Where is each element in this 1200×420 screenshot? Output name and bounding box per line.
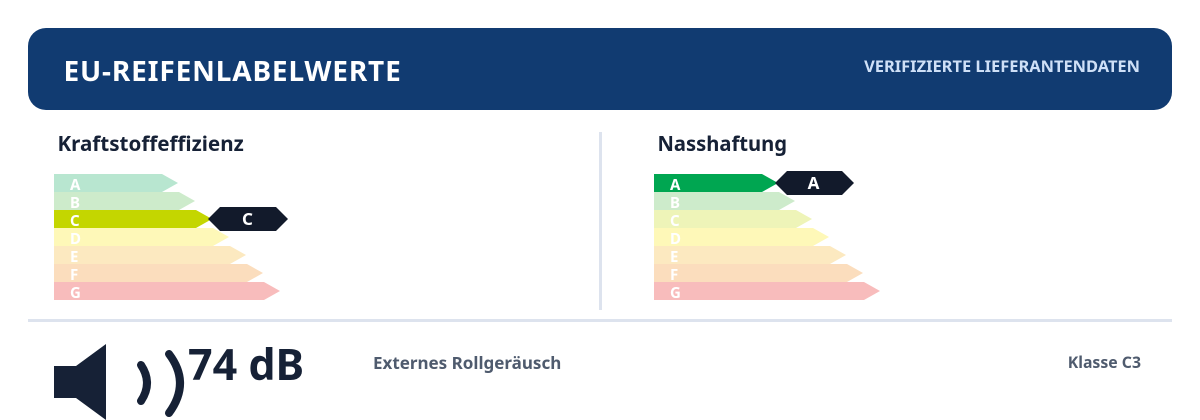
rating scale: fuel efficiency: B — [70, 193, 80, 213]
header banner — [28, 28, 1172, 110]
tyre class: Klasse C3 — [1068, 351, 1141, 373]
rating scale: wet grip: B — [670, 193, 680, 213]
rating scale: wet grip: D — [670, 229, 681, 249]
rating scale: fuel efficiency: D — [70, 229, 81, 249]
heading: fuel efficiency: Kraftstoffeffizienz — [58, 130, 244, 158]
panel: wet grip — [654, 129, 880, 303]
rating scale: fuel efficiency: G — [70, 283, 81, 303]
section divider — [28, 319, 1172, 322]
rating scale: wet grip — [654, 174, 880, 303]
rating badge: C — [208, 207, 288, 231]
heading: wet grip: Nasshaftung — [658, 129, 787, 157]
panel: fuel efficiency — [54, 130, 288, 303]
rating scale: fuel efficiency: A — [70, 175, 81, 195]
icon: speaker with sound waves — [54, 344, 180, 420]
rating scale: wet grip: C — [670, 211, 680, 231]
rating badge: A — [775, 171, 854, 195]
rating scale: fuel efficiency: C — [70, 211, 80, 231]
rating badge: A: A — [808, 171, 820, 194]
title: EU-REIFENLABELWERTE — [64, 52, 402, 90]
rating scale: wet grip: F — [670, 265, 678, 285]
noise label: Externes Rollgeräusch — [373, 351, 561, 374]
panel divider — [599, 132, 602, 310]
noise value: 74 dB — [188, 334, 304, 393]
header note: VERIFIZIERTE LIEFERANTENDATEN — [864, 54, 1140, 77]
rating scale: fuel efficiency: F — [70, 265, 78, 285]
rating scale: fuel efficiency — [54, 174, 280, 303]
rating scale: wet grip: A — [670, 175, 681, 195]
rating scale: wet grip: E — [670, 247, 678, 267]
rating scale: fuel efficiency: E — [70, 247, 78, 267]
rating scale: wet grip: G — [670, 283, 681, 303]
rating badge: C: C — [242, 207, 253, 230]
